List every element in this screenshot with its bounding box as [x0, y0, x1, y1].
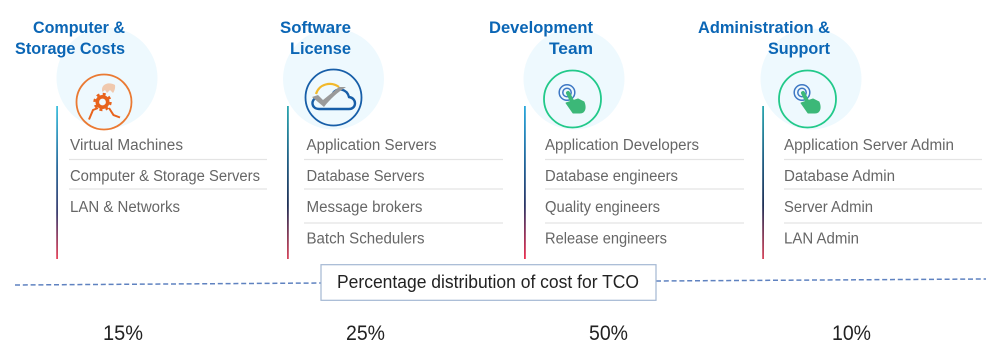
list: administration and support items: LAN Admin: [784, 230, 859, 248]
panel: computer and storage costs: [15, 18, 267, 259]
heading: development team: [489, 18, 593, 58]
vertical gradient line: [524, 106, 526, 259]
heading: administration and support: Support: [768, 39, 830, 58]
list: development team items: Database engineers: [545, 168, 678, 185]
list: computer and storage items: Virtual Machines: [70, 137, 183, 154]
list: software license items: Batch Schedulers: [306, 230, 425, 248]
list: software license items: Database Servers: [306, 168, 425, 185]
vertical gradient line: [287, 106, 289, 259]
list: development team items: Application Developers: [545, 137, 699, 154]
list: administration and support items: Database Admin: [784, 168, 895, 185]
list: administration and support items: [784, 137, 982, 248]
vertical gradient line: [56, 106, 58, 259]
panel: administration and support: [698, 18, 982, 259]
heading: software license: [280, 18, 351, 58]
dashed line: right of label: [656, 279, 986, 281]
percentage: 50%: 50%: [589, 322, 628, 345]
panel: software license: [280, 18, 503, 259]
list: development team items: Release engineers: [545, 230, 667, 248]
icon: touch hand: [544, 70, 601, 128]
label box: percentage distribution of cost for TCO: Percentage distribution of cost for TCO: [337, 272, 639, 292]
percentage: 25%: 25%: [346, 322, 385, 345]
background circle: computer and storage: [56, 28, 158, 128]
icon: touch hand: [779, 70, 836, 128]
background circle: software license: [283, 28, 384, 130]
heading: computer and storage costs: Computer &: [33, 18, 125, 37]
dashed line: left of label: [15, 283, 321, 285]
heading: development team: Team: [549, 39, 593, 58]
list: software license items: Message brokers: [306, 199, 423, 216]
heading: development team: Development: [489, 18, 593, 37]
label box: percentage distribution of cost for TCO: [321, 265, 656, 300]
percentage: 15%: 15%: [103, 322, 143, 345]
list: computer and storage items: [69, 137, 267, 216]
background circle: administration and support: [760, 28, 862, 130]
heading: software license: Software: [280, 18, 351, 37]
list: computer and storage items: LAN & Networks: [70, 199, 180, 216]
heading: software license: License: [290, 39, 351, 58]
icon: gear with antenna: [76, 74, 132, 130]
background circle: development team: [524, 28, 624, 130]
list: computer and storage items: Computer & Storage Servers: [70, 168, 260, 185]
heading: computer and storage costs: [15, 18, 125, 58]
vertical gradient line: [762, 106, 764, 259]
list: administration and support items: Server Admin: [784, 199, 873, 216]
list: development team items: [545, 137, 744, 248]
panel: development team: [489, 18, 744, 259]
heading: computer and storage costs: Storage Costs: [15, 39, 125, 58]
list: development team items: Quality engineers: [545, 199, 660, 216]
list: administration and support items: Application Server Admin: [784, 137, 954, 154]
list: software license items: Application Servers: [306, 137, 437, 154]
heading: administration and support: Administration &: [698, 18, 830, 37]
icon: cloud with check: [306, 70, 362, 126]
percentage: 10%: 10%: [832, 322, 871, 345]
list: software license items: [304, 137, 503, 248]
heading: administration and support: [698, 18, 830, 58]
